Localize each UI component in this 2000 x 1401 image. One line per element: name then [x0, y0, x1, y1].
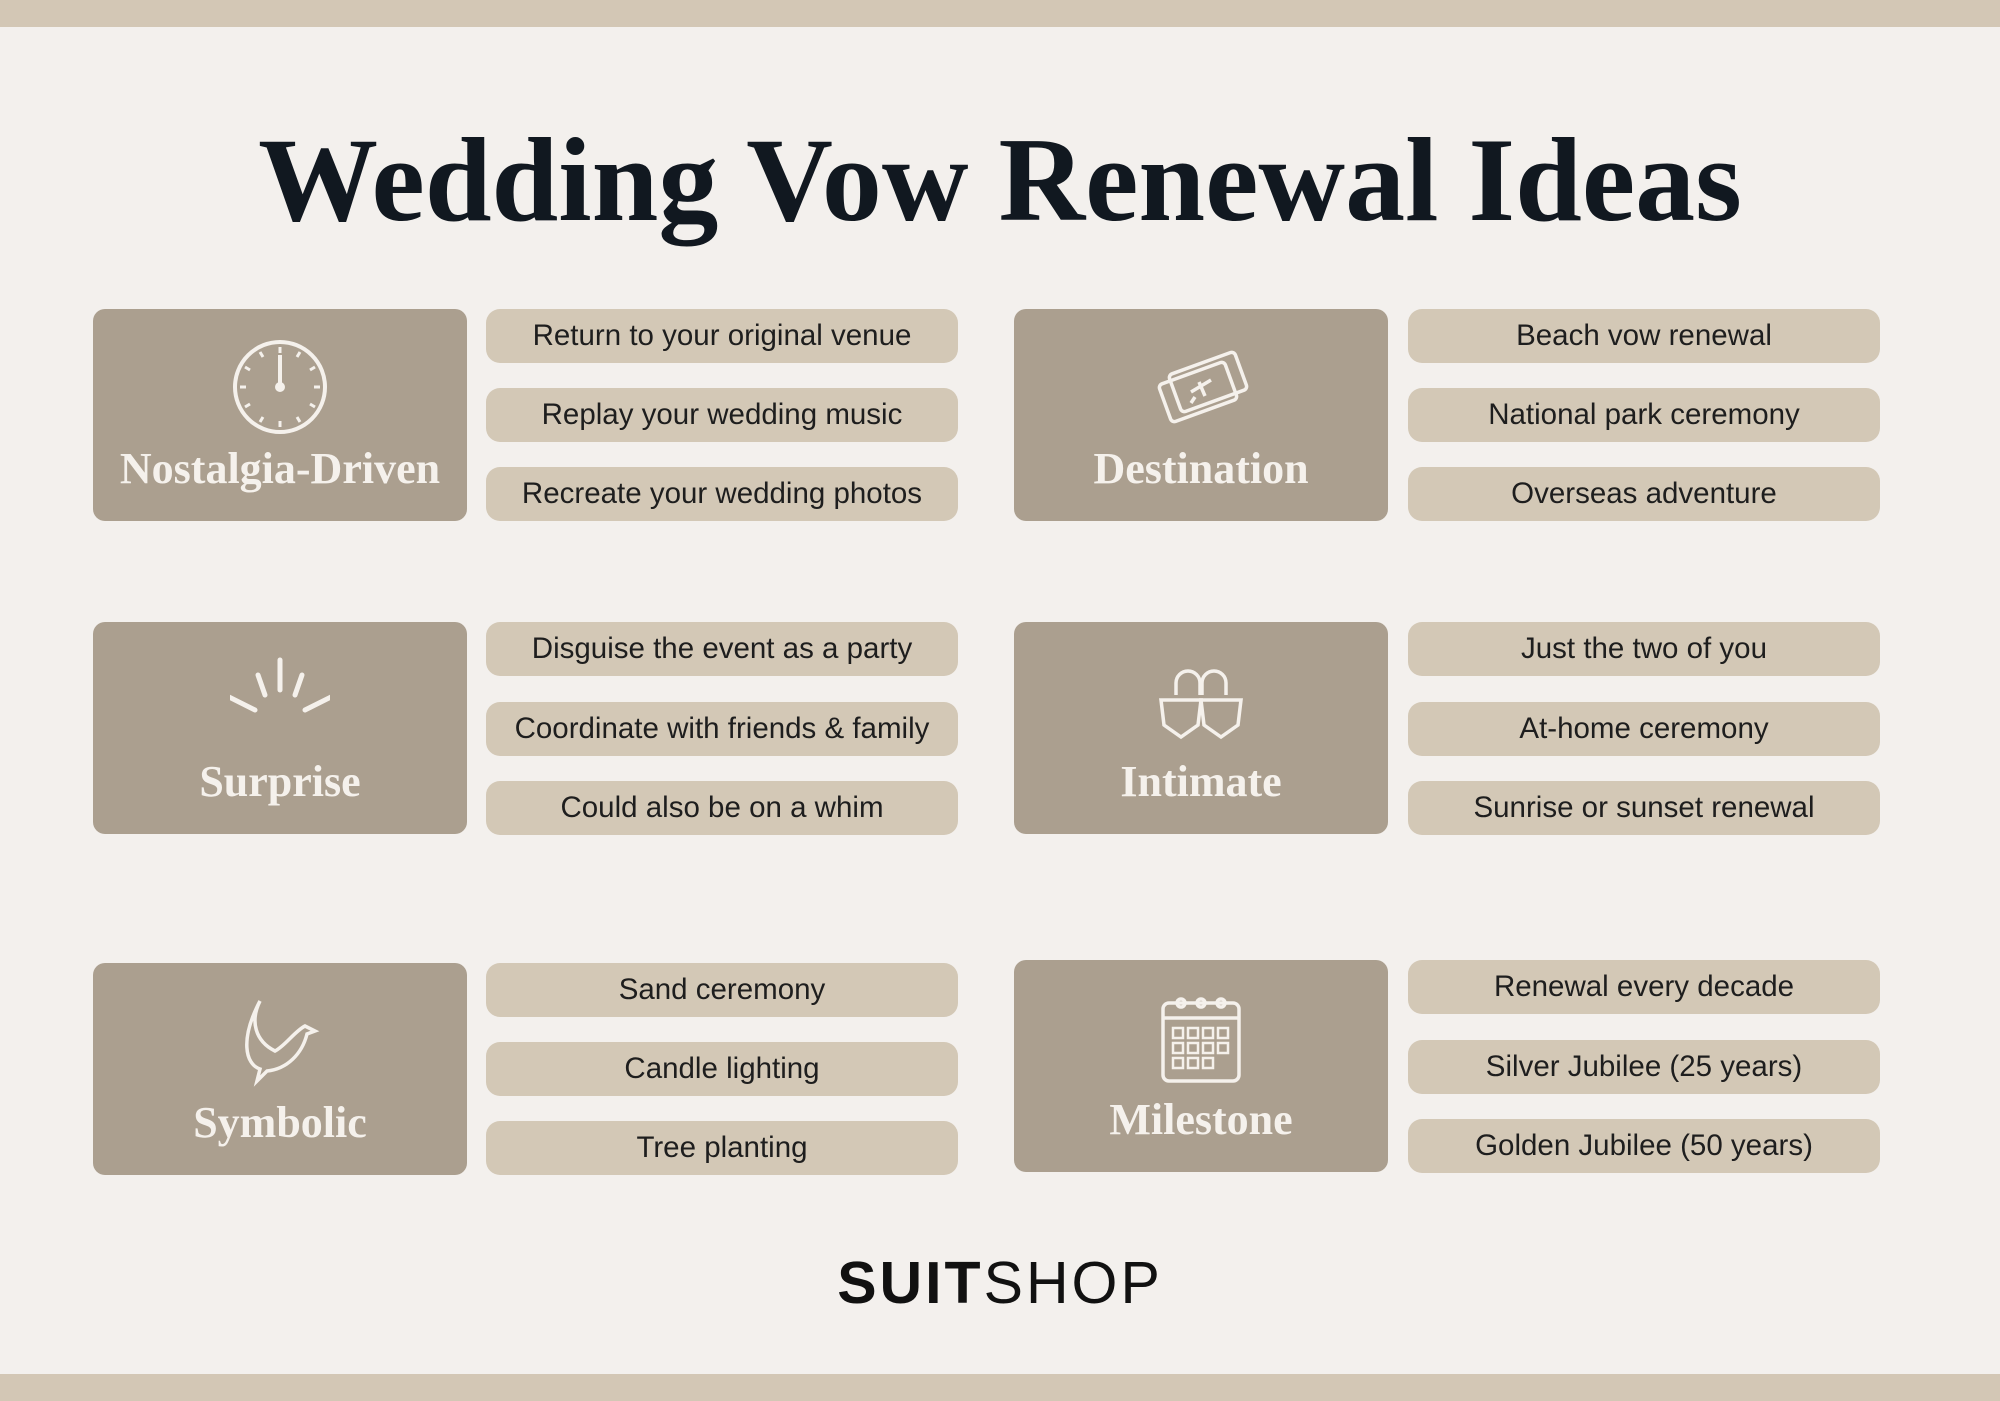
pills: intimate	[1408, 622, 1880, 835]
text: Candle lighting	[624, 1052, 820, 1085]
text: Silver Jubilee (25 years)	[1486, 1050, 1802, 1083]
panel: symbolic	[93, 963, 467, 1175]
text: Tree planting	[636, 1131, 808, 1164]
panel: milestone: Milestone	[1109, 1095, 1293, 1144]
text: Just the two of you	[1521, 632, 1767, 665]
pills: nostalgia	[486, 309, 958, 521]
text: Renewal every decade	[1494, 970, 1794, 1003]
text: Sand ceremony	[619, 973, 825, 1006]
text: At-home ceremony	[1519, 712, 1769, 745]
icon: clock	[233, 340, 327, 434]
pills: surprise	[486, 622, 958, 835]
title: Wedding Vow Renewal Ideas	[258, 113, 1742, 246]
icon: burst	[230, 658, 330, 712]
text: Replay your wedding music	[542, 398, 902, 431]
text: Beach vow renewal	[1516, 319, 1772, 352]
panel: intimate	[1014, 622, 1388, 834]
text: Golden Jubilee (50 years)	[1475, 1129, 1813, 1162]
pills: milestone	[1408, 960, 1880, 1173]
text: Overseas adventure	[1511, 477, 1777, 510]
panel: intimate: Intimate	[1120, 757, 1282, 806]
panel: destination: Destination	[1093, 444, 1309, 493]
panel: destination	[1014, 309, 1388, 521]
icon: locks	[1159, 669, 1243, 739]
panel: milestone	[1014, 960, 1388, 1172]
text: Coordinate with friends & family	[515, 712, 929, 745]
panel: surprise	[93, 622, 467, 834]
panel: nostalgia: Nostalgia-Driven	[120, 444, 440, 493]
pills: symbolic	[486, 963, 958, 1175]
panel: nostalgia	[93, 309, 467, 521]
text: National park ceremony	[1488, 398, 1800, 431]
panel: symbolic: Symbolic	[193, 1098, 367, 1147]
icon: tickets	[1158, 350, 1248, 424]
text: Disguise the event as a party	[532, 632, 912, 665]
icon: calendar	[1161, 997, 1241, 1083]
text: Recreate your wedding photos	[522, 477, 922, 510]
text: Could also be on a whim	[560, 791, 884, 824]
text: Sunrise or sunset renewal	[1473, 791, 1815, 824]
text: Return to your original venue	[533, 319, 911, 352]
pills: destination	[1408, 309, 1880, 521]
icon: dove	[245, 1000, 320, 1087]
logo: SUITSHOP	[837, 1250, 1163, 1316]
panel: surprise: Surprise	[199, 757, 361, 806]
